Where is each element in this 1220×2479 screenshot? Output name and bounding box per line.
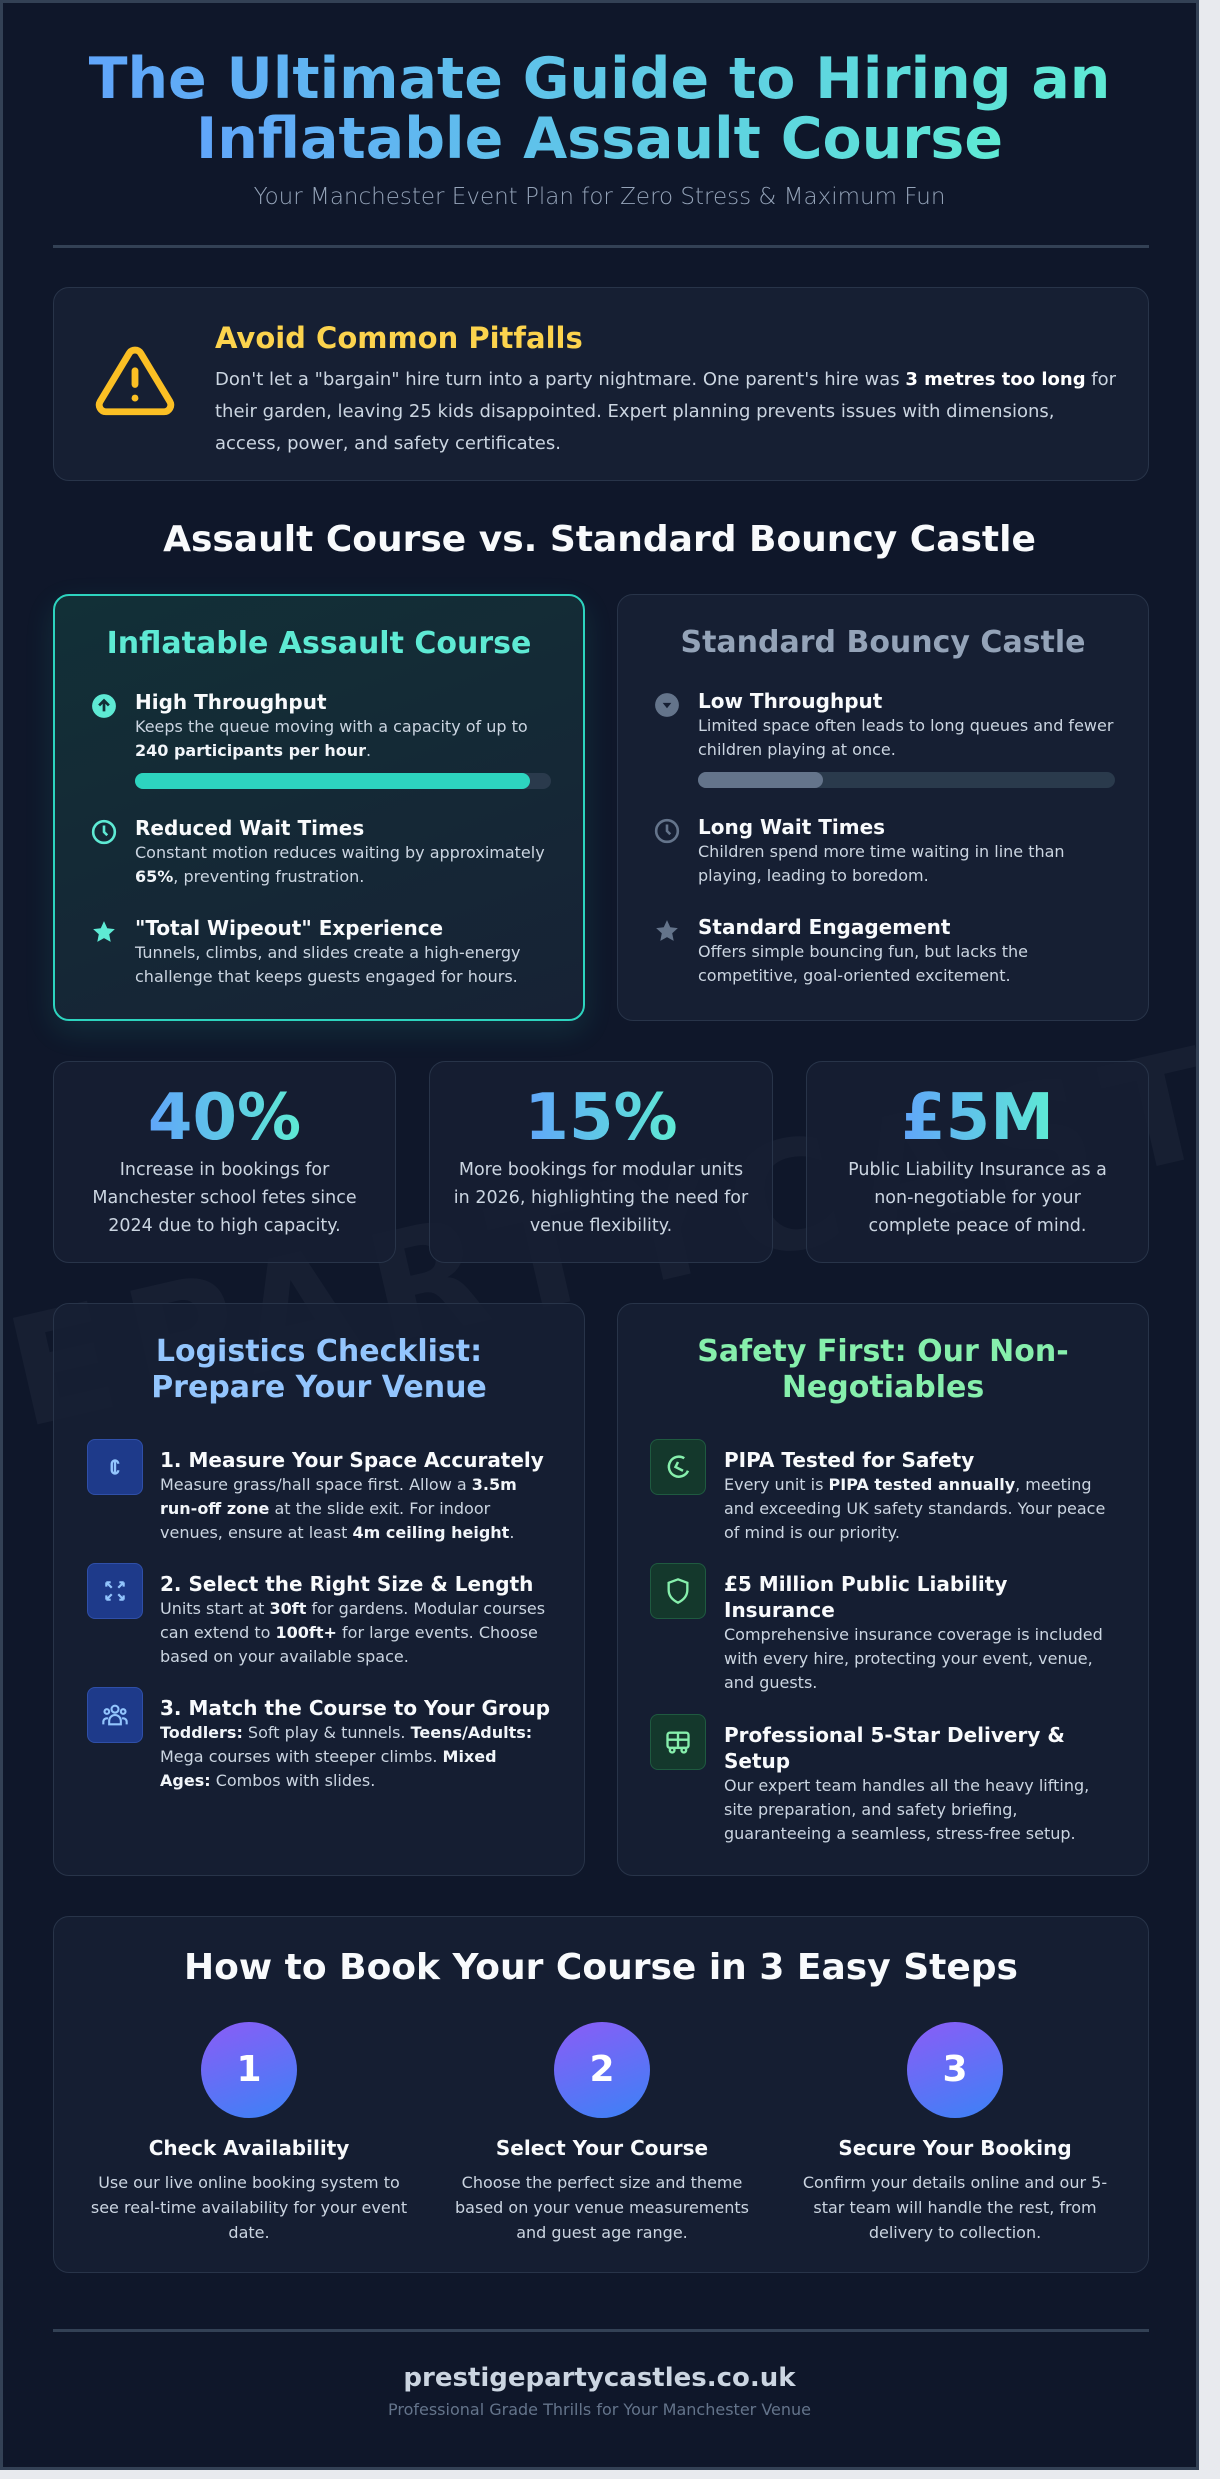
panel: safety: Our expert team handles all the heavy lifting, site preparation, and safety briefing, guaranteeing a seamless, stress-free setup. [724,1776,1089,1843]
panel: logistics: Measure grass/hall space first. Allow a 3.5m run-off zone at the slide exit. For indoor venues, ensure at least 4m ceiling height. [160,1475,517,1542]
heading: Inflatable Assault Course [107,626,531,661]
panel: assault course: Constant motion reduces waiting by approximately 65%, preventing frustration. [135,843,545,886]
step 2: Choose the perfect size and theme based on your venue measurements and guest age range. [455,2173,749,2242]
panel: safety: Comprehensive insurance coverage is included with every hire, protecting your event, venue, and guests. [724,1625,1103,1692]
heading: Safety First: Our Non- [697,1334,1069,1369]
step 3: 3 [942,2049,968,2090]
panel: bouncy castle: Children spend more time waiting in line than playing, leading to boredom. [698,842,1065,885]
step 3 [803,2022,1107,2242]
item: high throughput [92,690,551,789]
title [89,46,1110,172]
heading [697,1334,1069,1405]
heading: pitfalls: Avoid Common Pitfalls [215,321,583,355]
step 2 [455,2022,749,2242]
panel: assault course [53,594,585,1021]
heading: comparison: Assault Course vs. Standard Bouncy Castle [163,519,1036,560]
panel: logistics: 1. Measure Your Space Accurately [160,1448,544,1472]
panel: bouncy castle: Offers simple bouncing fun, but lacks the competitive, goal-oriented excitement. [698,942,1028,985]
item: size [87,1563,545,1666]
stat: 40% [53,1061,396,1263]
item: insurance [650,1563,1103,1692]
panel: bouncy castle: Standard Engagement [698,915,950,939]
panel: safety: Professional 5-Star Delivery & Setup [724,1723,1065,1773]
panel: assault course: Keeps the queue moving with a capacity of up to 240 participants per hour. [135,717,528,760]
step 2: 2 [589,2049,615,2090]
step 1: 1 [236,2049,262,2090]
footer: tagline: Professional Grade Thrills for Your Manchester Venue [388,2400,811,2419]
stat: 15%: More bookings for modular units in 2026, highlighting the need for venue flexibility. [454,1160,748,1236]
panel: bouncy castle: Long Wait Times [698,815,885,839]
item: wipeout [93,916,521,986]
stat: 40%: Increase in bookings for Manchester school fetes since 2024 due to high capacity. [92,1160,357,1236]
panel: logistics: 3. Match the Course to Your Group [160,1696,550,1720]
panel: bouncy castle [617,594,1149,1021]
panel: safety [617,1303,1149,1876]
panel: bouncy castle: Limited space often leads to long queues and fewer children playing at once. [698,716,1113,759]
step 3: Secure Your Booking [838,2136,1072,2160]
item: low throughput [655,689,1115,788]
heading: Prepare Your Venue [151,1370,487,1405]
heading: Negotiables [782,1370,984,1405]
title: Inflatable Assault Course [196,106,1003,172]
heading: Standard Bouncy Castle [680,625,1086,660]
panel: assault course: High Throughput [135,690,327,714]
panel: safety: PIPA Tested for Safety [724,1448,974,1472]
heading: Logistics Checklist: [156,1334,482,1369]
stat: 15% [429,1061,773,1263]
item: long wait [654,815,1065,885]
step 1: Check Availability [149,2136,349,2160]
stat: £5M: £5M [901,1081,1054,1155]
panel: assault course: Tunnels, climbs, and slides create a high-energy challenge that keeps guests engaged for hours. [135,943,521,986]
panel: safety: Every unit is PIPA tested annually, meeting and exceeding UK safety standards. Your peace of mind is our priority. [724,1475,1105,1542]
step 3: Confirm your details online and our 5-star team will handle the rest, from delivery to collection. [803,2173,1107,2242]
step 2: Select Your Course [496,2136,708,2160]
panel: assault course: Reduced Wait Times [135,816,364,840]
panel: logistics: 2. Select the Right Size & Length [160,1572,533,1596]
stat: 15%: 15% [524,1081,678,1155]
panel: pitfalls [53,287,1149,481]
stat: £5M [806,1061,1149,1263]
panel: logistics: Units start at 30ft for gardens. Modular courses can extend to 100ft+ for large events. Choose based on your available space. [160,1599,545,1666]
step 1: Use our live online booking system to see real-time availability for your event date. [91,2173,407,2242]
item: group [87,1687,550,1790]
panel: booking steps [53,1916,1149,2273]
title: The Ultimate Guide to Hiring an [89,46,1110,112]
panel: logistics: Toddlers: Soft play & tunnels. Teens/Adults: Mega courses with steeper climbs. Mixed Ages: Combos with slides. [160,1723,532,1790]
heading: How to Book Your Course in 3 Easy Steps [184,1947,1018,1988]
heading [151,1334,487,1405]
panel: safety: £5 Million Public Liability Insurance [724,1572,1007,1622]
item: delivery [650,1714,1089,1843]
subtitle: Your Manchester Event Plan for Zero Stress & Maximum Fun [254,184,945,210]
stat: 40%: 40% [148,1081,301,1155]
panel: assault course: "Total Wipeout" Experience [135,916,443,940]
item: wait times [92,816,545,886]
step 1 [91,2022,407,2242]
item: measure [87,1439,544,1542]
stat: £5M: Public Liability Insurance as a non-negotiable for your complete peace of mind. [848,1160,1107,1236]
text: pitfalls: Don't let a "bargain" hire turn into a party nightmare. One parent's hire was 3 metres too long for their garden, leaving 25 kids disappointed. Expert planning prevents issues with dimensions, access, power, and safety certificates. [215,369,1116,454]
panel: bouncy castle: Low Throughput [698,689,882,713]
item: PIPA [650,1439,1105,1542]
icon: warning [96,346,174,416]
panel: logistics [53,1303,585,1876]
footer: domain: prestigepartycastles.co.uk [403,2363,796,2393]
item: standard engagement [656,915,1028,985]
